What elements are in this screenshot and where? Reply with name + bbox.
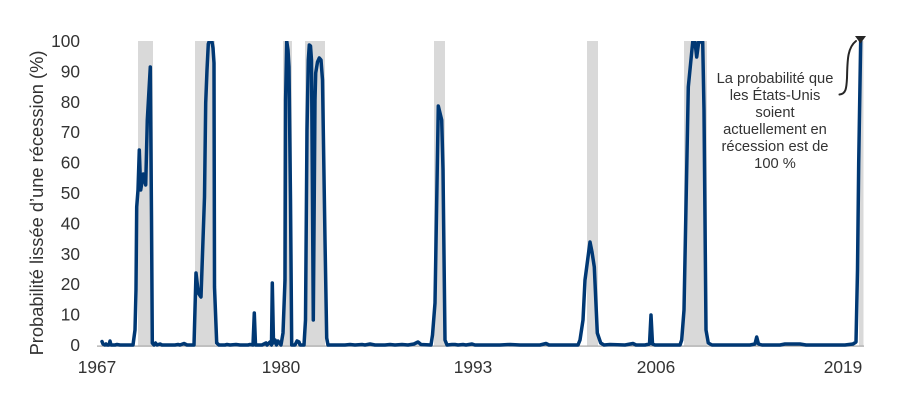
x axis labels: 1993 — [454, 357, 492, 377]
recession bands — [138, 41, 864, 346]
callout text — [717, 71, 833, 172]
x axis labels — [78, 357, 862, 377]
callout text: 100 % — [754, 156, 796, 172]
recession probability line — [102, 39, 861, 345]
y axis labels: 100 — [51, 31, 80, 51]
callout arrow — [840, 36, 866, 94]
callout text: La probabilité que — [717, 71, 833, 87]
y axis labels: 0 — [70, 335, 80, 355]
y axis labels: 40 — [61, 213, 80, 233]
callout text: soient — [755, 105, 795, 121]
y axis labels: 70 — [61, 122, 80, 142]
y axis labels: 20 — [61, 274, 80, 294]
x axis line — [97, 346, 864, 347]
callout text: récession est de — [722, 139, 828, 155]
y axis title: Probabilité lissée d’une récession (%) — [26, 51, 47, 355]
y axis labels: 50 — [61, 183, 80, 203]
x axis labels: 2006 — [637, 357, 675, 377]
y axis labels: 80 — [61, 92, 80, 112]
y axis labels: 30 — [61, 244, 80, 264]
x axis labels: 1980 — [262, 357, 300, 377]
y axis labels: 60 — [61, 153, 80, 173]
x axis labels: 2019 — [824, 357, 862, 377]
callout text: les États-Unis — [730, 87, 820, 104]
y axis labels: 90 — [61, 61, 80, 81]
callout text: actuellement en — [723, 122, 827, 138]
y axis labels: 10 — [61, 305, 80, 325]
x axis labels: 1967 — [78, 357, 116, 377]
y axis labels — [51, 31, 80, 355]
